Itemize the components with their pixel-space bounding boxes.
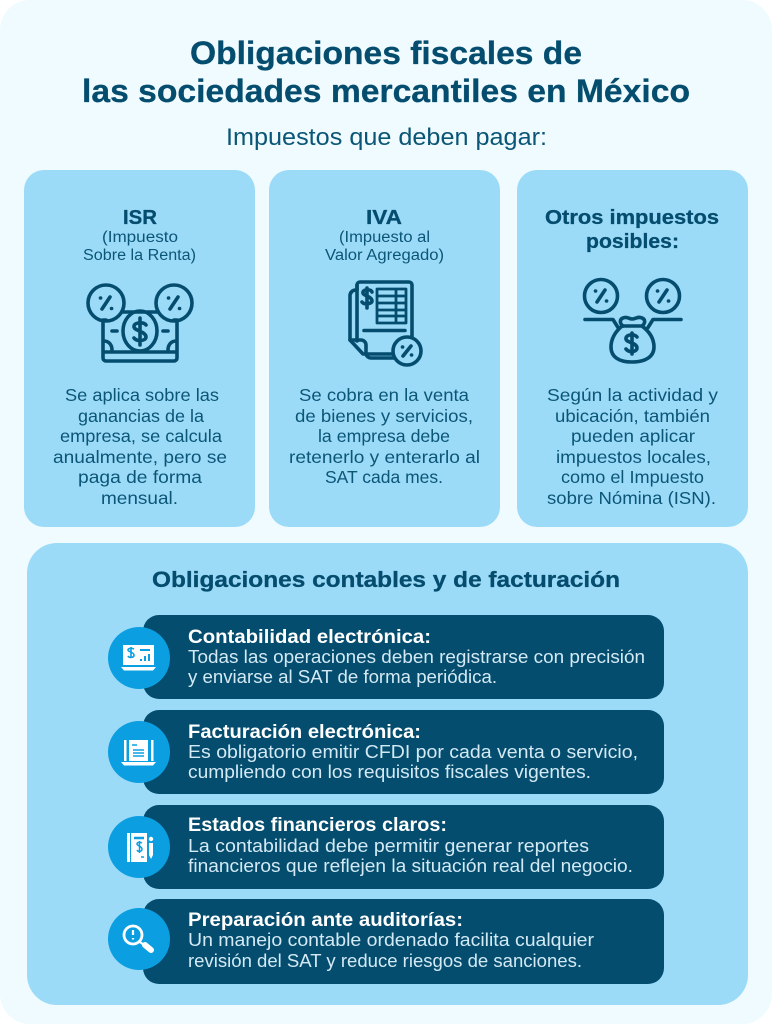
ISR description: mensual.	[101, 488, 178, 508]
ISR subtitle	[83, 229, 196, 264]
otros description: sobre Nómina (ISN).	[547, 488, 716, 508]
icon: invoice with percent	[350, 282, 421, 365]
ISR description: empresa, se calcula	[60, 426, 222, 446]
item text: y enviarse al SAT de forma periódica.	[188, 667, 497, 687]
item text: Todas las operaciones deben registrarse con precisión	[188, 647, 645, 667]
item text: financieros que reflejen la situación real del negocio.	[188, 856, 633, 876]
IVA description: SAT cada mes.	[325, 467, 443, 487]
otros description: Según la actividad y	[547, 385, 718, 405]
icon: magnifier with alert	[108, 908, 170, 970]
IVA description: de bienes y servicios,	[295, 406, 473, 426]
subtitle: Impuestos que deben pagar:	[226, 124, 547, 151]
IVA description: Se cobra en la venta	[299, 385, 469, 405]
otros heading: posibles:	[586, 231, 679, 253]
otros description: como el Impuesto	[561, 467, 704, 487]
title: las sociedades mercantiles en México	[82, 73, 690, 109]
ISR subtitle: (Impuesto	[102, 229, 178, 246]
otros description: impuestos locales,	[556, 447, 711, 467]
otros heading: Otros impuestos	[545, 207, 719, 229]
ISR description: anualmente, pero se	[53, 447, 227, 467]
ISR description: paga de forma	[78, 467, 202, 487]
icon: banknote with percent coins	[88, 285, 192, 361]
ISR description: ganancias de la	[78, 406, 204, 426]
otros description: pueden aplicar	[571, 426, 695, 446]
IVA subtitle	[325, 229, 444, 264]
IVA heading: IVA	[366, 207, 402, 229]
item text: Es obligatorio emitir CFDI por cada venta o servicio,	[188, 742, 638, 762]
otros description	[547, 385, 718, 508]
IVA description	[289, 385, 480, 487]
ISR description	[53, 385, 227, 508]
section heading: Obligaciones contables y de facturación	[152, 567, 620, 592]
icon: laptop with invoice	[108, 721, 170, 783]
item title: Preparación ante auditorías:	[188, 909, 463, 931]
item text: Un manejo contable ordenado facilita cualquier	[188, 930, 594, 950]
title: Obligaciones fiscales de	[190, 35, 582, 71]
icon: report and pen	[108, 816, 170, 878]
item: estados financieros	[108, 805, 664, 889]
item text: La contabilidad debe permitir generar reportes	[188, 836, 589, 856]
item title: Estados financieros claros:	[188, 814, 447, 836]
item text	[188, 930, 594, 971]
panel: obligaciones contables	[27, 543, 748, 1005]
item title: Facturación electrónica:	[188, 721, 421, 743]
item text	[188, 647, 645, 687]
IVA description: retenerlo y enterarlo al	[289, 447, 480, 467]
panel: otros impuestos	[517, 170, 748, 527]
item title: Contabilidad electrónica:	[188, 626, 431, 648]
panel: ISR	[24, 170, 255, 527]
otros heading	[545, 207, 719, 253]
panel: IVA	[269, 170, 500, 527]
IVA subtitle: (Impuesto al	[339, 229, 430, 246]
IVA description: la empresa debe	[318, 426, 450, 446]
title	[82, 35, 690, 109]
item text: cumpliendo con los requisitos fiscales vigentes.	[188, 762, 591, 782]
ISR description: Se aplica sobre las	[65, 385, 219, 405]
ISR heading: ISR	[123, 207, 158, 229]
icon: laptop with chart	[108, 627, 170, 689]
item text: revisión del SAT y reduce riesgos de sanciones.	[188, 951, 582, 971]
icon: money bag with percent coins	[584, 280, 681, 362]
item: preparación auditorías	[108, 899, 664, 984]
IVA subtitle: Valor Agregado)	[325, 247, 444, 264]
otros description: ubicación, también	[555, 406, 710, 426]
item: facturación electrónica	[108, 710, 664, 794]
item text	[188, 742, 638, 782]
item: contabilidad electrónica	[108, 615, 664, 699]
ISR subtitle: Sobre la Renta)	[83, 247, 196, 264]
item text	[188, 836, 633, 876]
